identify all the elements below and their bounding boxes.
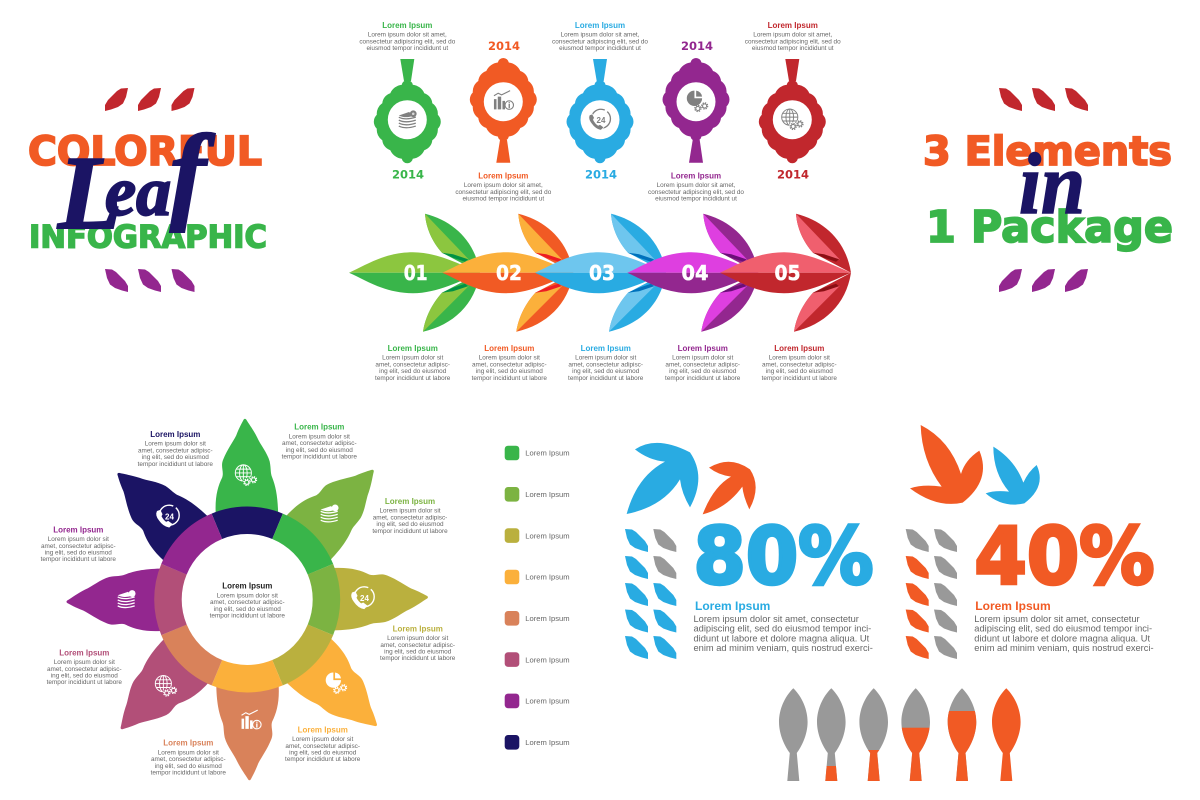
petal labels: ing elit, sed do eiusmod — [289, 750, 357, 757]
timeline item 2: orange — [455, 39, 552, 203]
center text: ing elit, sed do eiusmod — [214, 606, 281, 613]
legend: Lorem Ipsum — [525, 490, 570, 499]
timeline item 3: blue — [552, 21, 648, 182]
panel: 80 percent statistic — [625, 443, 874, 659]
title: colorful leaf infographic: INFOGRAPHIC — [29, 220, 267, 256]
numbers: 04 — [682, 261, 708, 285]
petal labels: Lorem Ipsum — [163, 739, 213, 748]
title: colorful leaf infographic: f — [170, 114, 215, 233]
petal labels: Lorem ipsum dolor sit — [387, 635, 448, 642]
petal labels: Lorem Ipsum — [385, 497, 435, 506]
text block: Lorem Ipsum — [975, 599, 1051, 613]
timeline item 5: red: Lorem ipsum dolor sit amet, — [753, 32, 832, 39]
timeline item 2: orange: Lorem ipsum dolor sit amet, — [464, 182, 543, 189]
ring — [154, 507, 340, 692]
timeline: five scalloped leaves — [359, 21, 841, 203]
legend — [505, 446, 570, 750]
value: 40% — [974, 512, 1154, 602]
leaf 01 — [349, 214, 480, 332]
numbers — [404, 261, 800, 285]
arrow: five leaf sequence — [349, 214, 851, 332]
petal labels: Lorem ipsum dolor sit — [289, 433, 350, 440]
timeline item 2: orange: 2014 — [488, 39, 520, 53]
pictogram: leaves 40 of 100 — [906, 529, 957, 659]
captions below leaf sequence: tempor incididunt ut labore — [375, 375, 451, 382]
timeline item 3: blue: 2014 — [585, 168, 617, 182]
captions below leaf sequence: ing elit, sed do eiusmod — [669, 368, 737, 375]
captions below leaf sequence: Lorem Ipsum — [388, 344, 438, 353]
petal labels: amet, consectetur adipisc- — [285, 743, 360, 750]
captions below leaf sequence: amet, consectetur adipisc- — [568, 361, 643, 368]
numbers: 02 — [496, 261, 522, 285]
legend: Lorem Ipsum — [525, 449, 570, 458]
petal labels: Lorem ipsum dolor sit — [48, 536, 109, 543]
petal labels: tempor incididunt ut labore — [47, 679, 122, 686]
title: colorful leaf infographic: L — [57, 134, 122, 251]
timeline item 3: blue: consectetur adipiscing elit, sed do — [552, 38, 648, 45]
icon: orange and blue leaf sprigs — [910, 425, 1040, 505]
captions below leaf sequence: amet, consectetur adipisc- — [762, 361, 837, 368]
captions below leaf sequence: tempor incididunt ut labore — [472, 375, 547, 382]
panel: 40 percent statistic — [906, 425, 1154, 659]
numbers: 05 — [774, 261, 800, 285]
numbers: 01 — [404, 261, 428, 285]
captions below leaf sequence: Lorem ipsum dolor sit — [769, 355, 830, 362]
icon: purple leaves below heading — [999, 269, 1088, 292]
captions below leaf sequence: tempor incididunt ut labore — [665, 375, 741, 382]
petal labels: ing elit, sed do eiusmod — [155, 763, 222, 770]
text block: enim ad minim veniam, quis nostrud exerci- — [974, 643, 1154, 653]
text block: didunt ut labore et dolore magna aliqua. Ut — [974, 633, 1150, 643]
petal labels: amet, consectetur adipisc- — [138, 447, 213, 454]
timeline item 5: red: consectetur adipiscing elit, sed do — [745, 38, 841, 45]
legend: Lorem Ipsum — [525, 655, 570, 664]
legend: Lorem Ipsum — [525, 531, 570, 540]
petal labels: amet, consectetur adipisc- — [380, 642, 455, 649]
timeline item 2: orange: consectetur adipiscing elit, sed do — [455, 189, 552, 196]
captions below leaf sequence: amet, consectetur adipisc- — [472, 361, 547, 368]
center text: Lorem ipsum dolor sit — [217, 592, 278, 599]
petal labels: tempor incididunt ut labore — [41, 556, 116, 563]
petal labels: Lorem Ipsum — [294, 423, 344, 432]
petal labels: Lorem Ipsum — [150, 430, 200, 439]
title: 3 elements in 1 package: 1 Package — [926, 202, 1173, 253]
petal labels: Lorem ipsum dolor sit — [54, 659, 115, 666]
petal labels: ing elit, sed do eiusmod — [51, 673, 118, 680]
captions below leaf sequence: Lorem ipsum dolor sit — [575, 355, 636, 362]
petal labels: tempor incididunt ut labore — [282, 454, 357, 461]
legend: Lorem Ipsum — [525, 697, 570, 706]
title: 3 elements in 1 package: 3 Elements — [923, 129, 1172, 175]
legend: Lorem Ipsum — [525, 573, 570, 582]
petal labels: ing elit, sed do eiusmod — [45, 550, 112, 557]
petal labels — [41, 423, 456, 776]
captions below leaf sequence: ing elit, sed do eiusmod — [572, 368, 640, 375]
numbers: 03 — [589, 261, 615, 285]
leaf 05 — [720, 214, 851, 332]
petal labels: Lorem ipsum dolor sit — [158, 749, 219, 756]
text block: adipiscing elit, sed do eiusmod tempor inci- — [974, 624, 1152, 634]
timeline item 1: green: Lorem Ipsum — [382, 21, 432, 30]
captions below leaf sequence: ing elit, sed do eiusmod — [379, 368, 447, 375]
text block: adipiscing elit, sed do eiusmod tempor inci- — [694, 624, 871, 634]
text block: enim ad minim veniam, quis nostrud exerci- — [694, 643, 873, 653]
title: colorful leaf infographic: ea — [105, 154, 171, 231]
captions below leaf sequence: amet, consectetur adipisc- — [375, 361, 450, 368]
icon: red leaves above heading — [999, 88, 1088, 111]
text block: Lorem ipsum dolor sit amet, consectetur — [974, 614, 1140, 624]
timeline item 3: blue: Lorem Ipsum — [575, 21, 625, 30]
timeline item 5: red — [745, 21, 841, 182]
petal labels: Lorem ipsum dolor sit — [145, 441, 206, 448]
captions below leaf sequence: Lorem Ipsum — [484, 344, 534, 353]
title: colorful leaf infographic — [28, 88, 267, 292]
title: colorful leaf infographic: COLORFUL — [28, 129, 262, 175]
petal labels: ing elit, sed do eiusmod — [376, 521, 444, 528]
captions below leaf sequence: ing elit, sed do eiusmod — [476, 368, 543, 375]
petal labels: tempor incididunt ut labore — [151, 770, 226, 777]
petal labels: tempor incididunt ut labore — [285, 756, 361, 763]
captions below leaf sequence: Lorem Ipsum — [678, 344, 728, 353]
petal labels: Lorem Ipsum — [59, 648, 109, 657]
petal labels: amet, consectetur adipisc- — [373, 514, 447, 521]
captions below leaf sequence: Lorem ipsum dolor sit — [382, 355, 443, 362]
captions below leaf sequence: tempor incididunt ut labore — [568, 375, 644, 382]
timeline item 4: purple: consectetur adipiscing elit, sed do — [648, 189, 744, 196]
timeline item 3: blue: Lorem ipsum dolor sit amet, — [561, 32, 640, 39]
timeline item 3: blue: eiusmod tempor incididunt ut — [559, 45, 641, 52]
timeline item 4: purple: eiusmod tempor incididunt ut — [655, 196, 737, 203]
center text: Lorem Ipsum — [222, 582, 272, 591]
timeline item 2: orange: eiusmod tempor incididunt ut — [462, 196, 544, 203]
center text — [210, 582, 285, 620]
timeline item 5: red: Lorem Ipsum — [768, 21, 818, 30]
text block — [694, 599, 873, 653]
timeline item 1: green: consectetur adipiscing elit, sed do — [359, 38, 456, 45]
captions below leaf sequence — [375, 344, 837, 382]
icon: purple leaves below title — [105, 269, 194, 292]
petal labels: ing elit, sed do eiusmod — [384, 649, 452, 656]
icon: red leaves above title — [105, 88, 194, 111]
captions below leaf sequence: Lorem ipsum dolor sit — [479, 355, 540, 362]
text block — [974, 599, 1154, 653]
petal labels: amet, consectetur adipisc- — [282, 440, 357, 447]
timeline item 4: purple: Lorem ipsum dolor sit amet, — [657, 182, 736, 189]
captions below leaf sequence: Lorem Ipsum — [581, 344, 631, 353]
timeline item 1: green: 2014 — [392, 168, 424, 182]
timeline item 4: purple: 2014 — [681, 39, 713, 53]
petal labels: amet, consectetur adipisc- — [47, 666, 122, 673]
leaf 02 — [442, 214, 573, 332]
leaf 04 — [627, 214, 758, 332]
captions below leaf sequence: Lorem Ipsum — [774, 344, 824, 353]
captions below leaf sequence: Lorem ipsum dolor sit — [672, 355, 733, 362]
petal labels: amet, consectetur adipisc- — [151, 756, 226, 763]
timeline item 1: green: Lorem ipsum dolor sit amet, — [368, 32, 447, 39]
petal labels: tempor incididunt ut labore — [372, 528, 448, 535]
timeline item 4: purple — [648, 39, 744, 203]
text block: didunt ut labore et dolore magna aliqua. Ut — [694, 633, 870, 643]
petal labels: Lorem ipsum dolor sit — [379, 508, 441, 515]
petal labels: ing elit, sed do eiusmod — [286, 447, 353, 454]
petal icons: 24 — [360, 594, 369, 603]
petal icons: 24 — [165, 512, 174, 522]
petal labels: amet, consectetur adipisc- — [41, 543, 116, 550]
title: 3 elements in 1 package — [923, 88, 1173, 292]
center text: amet, consectetur adipisc- — [210, 599, 285, 606]
value: 80% — [694, 512, 874, 602]
petal labels: tempor incididunt ut labore — [138, 461, 213, 468]
timeline item 1: green — [359, 21, 456, 182]
timeline item 4: purple: Lorem Ipsum — [671, 172, 721, 180]
petal labels: tempor incididunt ut labore — [380, 655, 456, 662]
chart: leaf fill levels — [779, 688, 1021, 782]
petal labels: Lorem Ipsum — [53, 525, 103, 534]
petal labels: Lorem Ipsum — [393, 624, 443, 633]
petal labels: ing elit, sed do eiusmod — [142, 454, 209, 461]
captions below leaf sequence: ing elit, sed do eiusmod — [766, 368, 833, 375]
timeline item 5: red: eiusmod tempor incididunt ut — [752, 45, 834, 52]
petal labels: Lorem ipsum dolor sit — [292, 736, 353, 743]
captions below leaf sequence: tempor incididunt ut labore — [762, 375, 837, 382]
petals — [66, 419, 428, 780]
leaf 03 — [535, 214, 666, 332]
pictogram: leaves 80 of 100 — [625, 529, 676, 659]
text block: Lorem ipsum dolor sit amet, consectetur — [694, 614, 859, 624]
timeline item 2: orange: Lorem Ipsum — [478, 172, 528, 180]
petal icons — [118, 465, 374, 729]
text block: Lorem Ipsum — [695, 599, 770, 613]
legend: Lorem Ipsum — [525, 614, 570, 623]
flower diagram — [41, 419, 456, 780]
timeline item 5: red: 2014 — [777, 168, 809, 182]
title: 3 elements in 1 package: in — [1019, 135, 1085, 232]
center text: tempor incididunt ut labore — [210, 613, 285, 620]
icon: blue and orange leaf sprigs — [627, 443, 756, 514]
captions below leaf sequence: amet, consectetur adipisc- — [665, 361, 740, 368]
petal labels: Lorem Ipsum — [298, 725, 348, 734]
timeline item 1: green: eiusmod tempor incididunt ut — [366, 45, 448, 52]
legend: Lorem Ipsum — [525, 738, 570, 747]
timeline item 3: blue: 24 — [597, 116, 606, 125]
